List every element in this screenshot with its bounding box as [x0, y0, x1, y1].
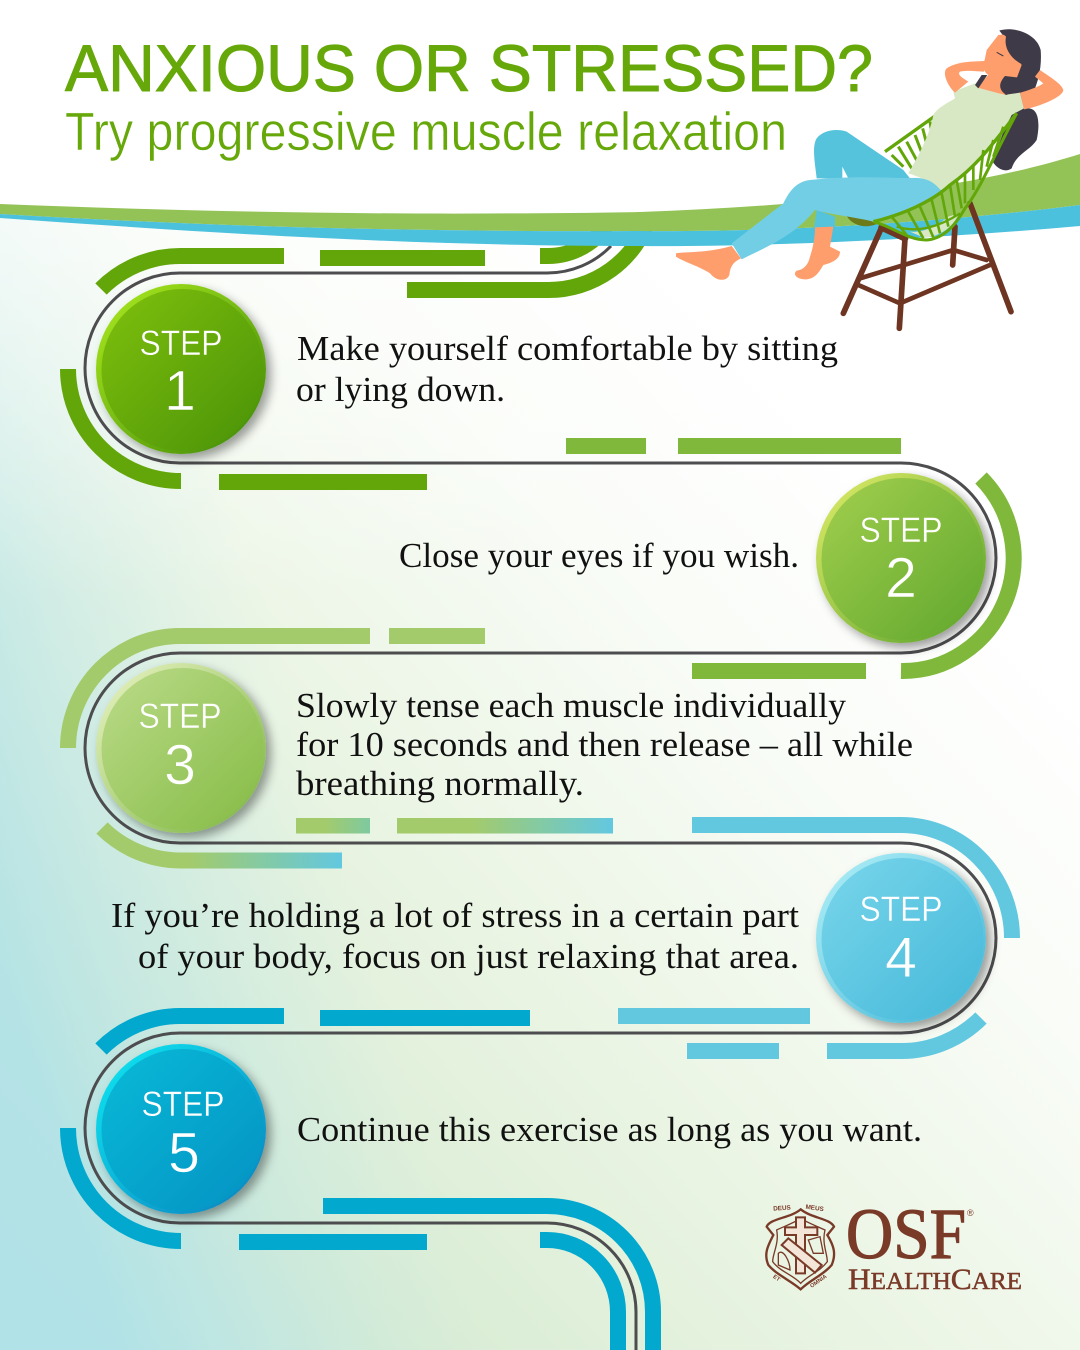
seat underside [847, 216, 877, 226]
step 2 badge [816, 473, 986, 643]
step 5 badge: 5 [168, 1121, 200, 1185]
logo: OSF HealthCare [766, 1194, 1022, 1296]
chair legs [843, 203, 1011, 328]
logo: OSF HealthCare: ® [967, 1208, 974, 1218]
title: ANXIOUS OR STRESSED? [65, 31, 873, 105]
right arm [1020, 70, 1063, 109]
step 3 badge: STEP [138, 697, 222, 736]
road segments: step 3 [68, 636, 613, 860]
step 2 badge: 2 [885, 546, 917, 610]
step 4 badge: 4 [885, 926, 917, 990]
road segments: step 4 [618, 825, 1012, 1051]
subtitle: Try progressive muscle relaxation [65, 102, 787, 162]
chair seat [873, 113, 1017, 240]
front hair [999, 30, 1033, 95]
header swoosh [0, 154, 1080, 246]
step 4 badge: STEP [860, 890, 942, 929]
step 2 text: Close your eyes if you wish. [399, 536, 799, 575]
seat highlight [910, 213, 958, 237]
step 2 badge: STEP [860, 511, 942, 550]
logo shield: DEUS [773, 1204, 791, 1213]
hair back [993, 29, 1041, 170]
step 3 badge: 3 [164, 733, 196, 797]
step 3 text: breathing normally. [296, 764, 584, 803]
front foot [676, 246, 741, 280]
logo shield: ET [772, 1274, 781, 1283]
logo shield [766, 1204, 834, 1290]
step 4 text: If you’re holding a lot of stress in a certain part [111, 896, 799, 935]
shirt [908, 83, 1024, 191]
step 3 badge [96, 663, 266, 833]
step 4 text [111, 896, 799, 976]
step 5 badge [96, 1044, 266, 1214]
logo shield: MEUS [805, 1204, 824, 1213]
left arm [945, 61, 984, 93]
logo: OSF HealthCare: HEALTHCARE [848, 1263, 1022, 1296]
face and neck [977, 35, 1022, 95]
step 5 badge: STEP [142, 1085, 224, 1124]
road segments: step 1 [68, 215, 650, 482]
logo shield: OMNIA [809, 1274, 828, 1290]
road segments: step 5 [68, 1016, 653, 1350]
back leg [814, 130, 910, 228]
step 1 badge: 1 [164, 359, 196, 423]
illustration: woman relaxing in chair [676, 29, 1063, 328]
road segments: step 2 [566, 446, 1014, 671]
step 3 text [296, 686, 913, 803]
step 4 text: of your body, focus on just relaxing that area. [138, 937, 799, 976]
step 1 text: or lying down. [296, 370, 505, 409]
step 1 badge [96, 284, 266, 454]
front leg [732, 177, 942, 259]
step 5 text: Continue this exercise as long as you want. [297, 1110, 922, 1149]
closed eye [997, 52, 1003, 56]
step 1 text [296, 329, 838, 409]
step 1 text: Make yourself comfortable by sitting [297, 329, 838, 368]
winding road line [85, 246, 996, 1350]
step 1 badge: STEP [140, 324, 222, 363]
step 3 text: Slowly tense each muscle individually [296, 686, 846, 725]
back foot [795, 227, 840, 279]
step 4 badge [816, 853, 986, 1023]
logo wordmark: OSF [846, 1194, 966, 1274]
step 3 text: for 10 seconds and then release – all while [296, 725, 913, 764]
chair back spokes [885, 116, 935, 168]
